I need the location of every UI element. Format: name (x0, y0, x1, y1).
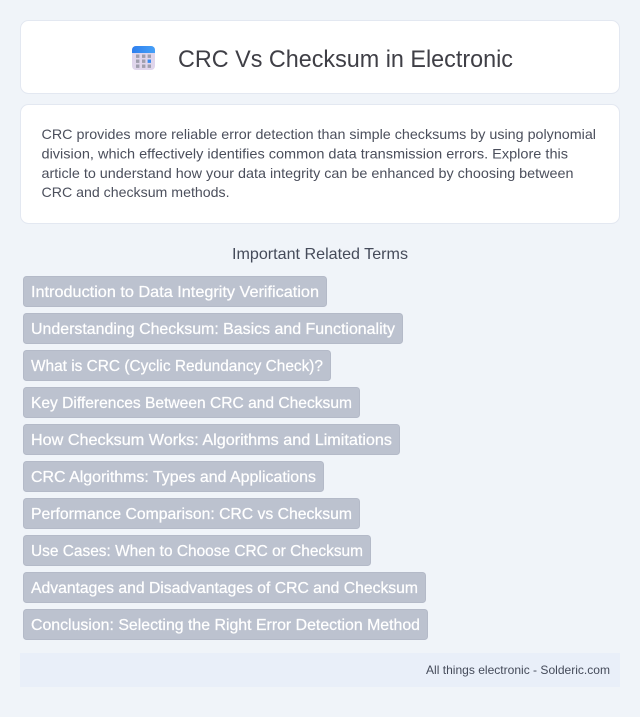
term chip 1 (24, 276, 326, 306)
term chip 6 (24, 462, 324, 492)
intro text: CRC provides more reliable error detection than simple checksums by using polynomial (42, 126, 596, 142)
term chip 2 (24, 314, 402, 344)
term chip 5 (24, 424, 400, 454)
intro text: CRC and checksum methods. (42, 184, 230, 200)
intro text: article to understand how your data integrity can be enhanced by choosing between (42, 165, 574, 181)
footer: All things electronic - Solderic.com (426, 663, 610, 677)
heading: important related terms: Important Related Terms (232, 246, 408, 263)
term chip 9: Advantages and Disadvantages of CRC and Checksum (31, 580, 418, 597)
term chip 8: Use Cases: When to Choose CRC or Checksum (31, 543, 363, 560)
term chip 7: Performance Comparison: CRC vs Checksum (31, 506, 352, 523)
term chip 1: Introduction to Data Integrity Verification (31, 284, 319, 301)
term chip 2: Understanding Checksum: Basics and Functionality (31, 321, 395, 338)
term chip 3: What is CRC (Cyclic Redundancy Check)? (31, 358, 323, 375)
intro panel (20, 104, 620, 224)
intro text (42, 126, 596, 200)
term chip 3 (24, 350, 330, 380)
footer (20, 653, 620, 687)
term chip 5: How Checksum Works: Algorithms and Limitations (31, 432, 392, 449)
term chip 10: Conclusion: Selecting the Right Error Detection Method (31, 617, 420, 634)
intro text: division, which effectively identifies common data transmission errors. Explore this (42, 146, 568, 162)
term list (24, 276, 428, 640)
header panel (20, 20, 620, 94)
term chip 8 (24, 536, 370, 566)
title: CRC Vs Checksum in Electronic (178, 46, 513, 73)
term chip 7 (24, 498, 360, 528)
term chip 6: CRC Algorithms: Types and Applications (31, 469, 316, 486)
term chip 4 (24, 388, 360, 418)
term chip 10 (24, 610, 428, 640)
term chip 4: Key Differences Between CRC and Checksum (31, 395, 352, 412)
term chip 9 (24, 572, 426, 602)
icon: calculator (132, 46, 155, 70)
